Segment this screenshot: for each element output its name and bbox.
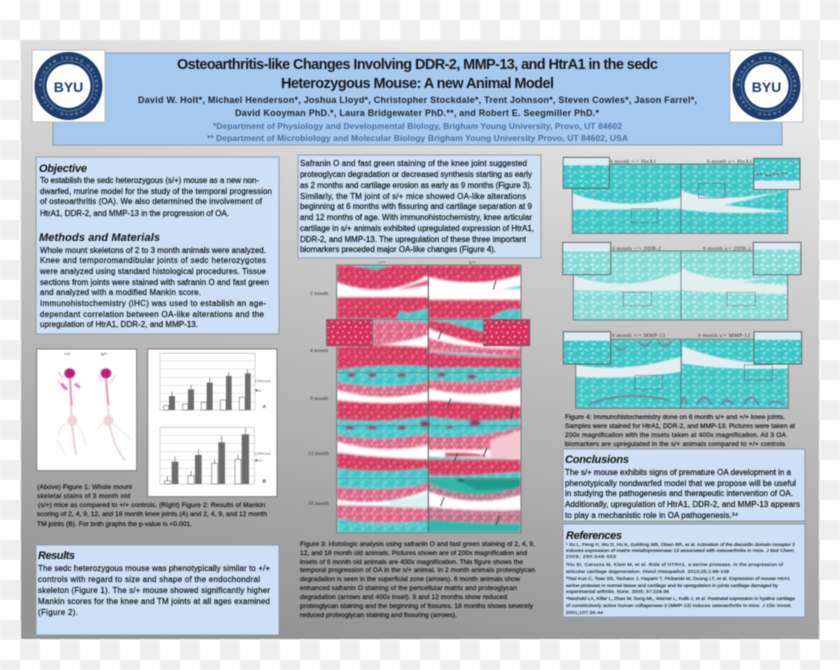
- bar chart B: s/+: [258, 458, 263, 462]
- authors: [138, 95, 697, 118]
- caption: figure 3: insets of 6 month old animals are 400x magnification. This figure shows the: [300, 559, 523, 566]
- caption: figure 3: degradation (arrows and 400x inset). 9 and 12 months show reduced: [300, 594, 507, 601]
- reference list: induces expression of matrix metalloproteinase 13 associated with osteoarthritis in mice. J Biol Chem.: [566, 548, 795, 554]
- bar chart B: Wild type: [258, 452, 271, 456]
- caption: figure 4: biomarkers are upregulated in the s/+ animals compared to +/+ controls: [565, 441, 786, 448]
- inset: MMP-13 left: [563, 332, 611, 364]
- caption: figure 3: enhanced safranin O staining of the pericellular matrix and proteoglycan: [300, 585, 517, 592]
- title: Heterozygous Mouse: A new Animal Model: [281, 76, 554, 92]
- inset: HtrA1 left: [563, 157, 609, 188]
- objective text: [40, 176, 272, 218]
- caption: figure 3: reduced proteoglycan staining and fissuring (arrows).: [300, 612, 457, 619]
- results text: controls with regard to size and shape of the endochondral: [38, 575, 260, 584]
- title: Osteoarthritis-like Changes Involving DDR-2, MMP-13, and HtrA1 in the sedc: [177, 57, 658, 73]
- panel: objective and methods: [36, 157, 279, 334]
- reference list: [566, 542, 795, 616]
- caption: figure 3: degradation is seen in the superficial zone (arrows). 6 month animals show: [300, 576, 520, 583]
- caption: figure 3: Figure 3: Histologic analysis using safranin O and fast green staining of 2, 4, 9,: [300, 541, 535, 548]
- heading: references: References: [566, 530, 622, 542]
- figure 4 panel labels: 6 month s/+ HtrA1: [707, 159, 752, 165]
- heading: conclusions: Conclusions: [565, 454, 629, 466]
- heading: objective: Objective: [39, 163, 87, 175]
- inset: DDR-2 right: [753, 242, 801, 275]
- bar chart B: [160, 427, 271, 484]
- caption: figure 3: proteoglycan staining and the beginning of fissures. 18 months shows severely: [300, 603, 534, 610]
- caption: figure 4: [565, 414, 795, 448]
- figure 3 column labels: +/+: [378, 260, 386, 266]
- figure 1: whole mount skeleton photo: [37, 349, 137, 471]
- reference list: serine protease in normal tissue and cartilage and its upregulation in joints cartilage damaged by: [566, 583, 779, 589]
- methods text: Immunohistochemistry (IHC) was used to establish an age-: [40, 299, 266, 308]
- figure 3 row labels: 18 month: [308, 501, 329, 507]
- logo: BYU left: BYU: [54, 79, 83, 95]
- methods text: and analyzed with a modified Mankin score.: [40, 288, 201, 297]
- figure 3 row labels: 2 month: [310, 291, 328, 297]
- caption: figures 1 and 2: (Above) Figure 1: Whole mount: [37, 484, 132, 491]
- figure 4: immunohistochemistry panels: [563, 157, 802, 408]
- figure 4 panel labels: 6 month +/+ HtrA1: [610, 159, 656, 165]
- figure 4 panel labels: 6 month s/+ MMP-13: [698, 333, 750, 339]
- figure 3 row labels: 12 month: [308, 451, 329, 457]
- results text: Mankin scores for the knee and TM joints at all ages examined: [38, 597, 270, 606]
- panel: middle intro text: beginning at 6 months with fissuring and cartilage separation at 9: [300, 202, 533, 211]
- caption: figures 1 and 2: (s/+) mice as compared to +/+ controls. (Right) Figure 2: Results of Mankin: [38, 502, 265, 509]
- bar chart A: [160, 353, 271, 410]
- figure 4 panel labels: 6 month +/+ MMP-13: [612, 333, 665, 339]
- conclusions text: phenotypically nondwarfed model that we propose will be useful: [565, 479, 796, 488]
- reference list: experimental arthritis. Bone. 2005; 37:229-36: [566, 589, 669, 595]
- panel: HtrA1: [563, 157, 800, 233]
- panel: middle intro text: biomarkers preceded major OA-like changes (Figure 4).: [300, 245, 496, 254]
- panel: middle intro text: [298, 155, 541, 258]
- methods text: dependant correlation between OA-like alterations and the: [40, 310, 265, 319]
- methods text: [39, 246, 269, 329]
- conclusions text: in studying the pathogenesis and therapeutic intervention of OA.: [565, 489, 793, 498]
- row: 9 month: [337, 373, 521, 426]
- affiliations: *Department of Physiology and Developmental Biology, Brigham Young University, Provo, UT 84602: [213, 121, 622, 131]
- figure 3 row labels: 9 month: [310, 396, 328, 402]
- conclusions text: [565, 468, 800, 520]
- reference list: articular cartilage degeneration. Histol Histopathol. 2010;25:1:98-108: [566, 569, 729, 575]
- methods text: Knee and temporomandibular joints of sedc heterozygotes: [40, 256, 266, 265]
- heading: results: Results: [38, 550, 75, 562]
- inset: HtrA1 right: [754, 158, 800, 189]
- caption: figure 3: 12, and 18 month old animals. Pictures shown are of 200x magnification and: [300, 550, 527, 557]
- bar chart A: Wild type: [258, 379, 271, 383]
- objective text: dwarfed, murine model for the study of the temporal progression: [40, 187, 272, 196]
- reference list: 2001;107:35-44: [566, 610, 603, 616]
- caption: figure 4: Figure 4: Immunohistochemistry done on 6 month s/+ and +/+ knee joints.: [565, 414, 785, 421]
- figure 2: Mankin score bar charts: [148, 349, 277, 497]
- row: 2 month: [337, 265, 521, 319]
- panel: middle intro text: as 2 months and cartilage erosion as early as 9 months (Figure 3).: [300, 181, 532, 190]
- panel: DDR-2: [563, 242, 801, 320]
- conclusions text: to play a mechanistic role in OA pathogenesis.³⁴: [565, 511, 739, 520]
- figure 3 row labels: [308, 291, 329, 507]
- panel: results: [36, 545, 279, 635]
- panel: middle intro text: and 12 months of age. With immunohistochemistry, knee articular: [300, 213, 532, 222]
- figure 3 column labels: s/+: [469, 260, 476, 266]
- panel: middle intro text: proteoglycan degradation or decreased synthesis starting as early: [300, 170, 532, 179]
- header banner: [53, 53, 782, 145]
- figure 4 panel labels: [610, 159, 752, 339]
- panel: middle intro text: cartilage in s/+ animals exhibited upregulated expression of HtrA1,: [300, 224, 534, 233]
- figure 1: whole mount skeleton photo: +/+: [64, 351, 71, 356]
- figure 4 panel labels: 6 month s/+ DDR-2: [703, 246, 751, 252]
- caption: figures 1 and 2: [37, 484, 267, 528]
- objective text: of osteoarthritis (OA). We also determined the involvement of: [40, 197, 263, 206]
- reference list: of constitutively active human collagenase-3 (MMP-13) induces osteoarthritis in mice. J Clin Invest.: [566, 603, 792, 609]
- methods text: sections from joints were stained with safranin O and fast green: [40, 278, 269, 287]
- logo: BYU left: BRIGHAM YOUNG UNIVERSITY · PROVO, UTAH ·: [38, 56, 99, 116]
- figure 1: whole mount skeleton photo: s/+: [101, 351, 108, 356]
- bar chart A: s/+: [258, 388, 263, 392]
- panel: middle intro text: Safranin O and fast green staining of the knee joint suggested: [300, 159, 527, 168]
- results text: The sedc heterozygous mouse was phenotypically similar to +/+: [38, 564, 270, 573]
- figure 3 column labels: [378, 260, 476, 266]
- affiliations: [207, 121, 628, 143]
- caption: figure 4: Samples were stained for HtrA1, DDR-2, and MMP-13. Pictures were taken at: [565, 423, 795, 430]
- inset: right 6 month: [484, 320, 530, 346]
- reference list: ⁴Neuhold LA, Killar L, Zhao W, Sung ML, Warner L, Kulik J, et al. Postnatal expression in hyaline cartilage: [566, 596, 795, 602]
- methods text: were analyzed using standard histological procedures. Tissue: [39, 267, 267, 276]
- authors: David W. Holt*, Michael Henderson*, Joshua Lloyd*, Christopher Stockdale*, Trent Johnson*, Steven Cowles*, Jason Farrel*,: [138, 95, 697, 105]
- panel: conclusions: [563, 449, 805, 521]
- results text: [38, 564, 270, 617]
- logo: BYU right: BYU: [752, 79, 781, 95]
- objective text: To establish the sedc heterozygous (s/+) mouse as a new non-: [40, 176, 259, 185]
- methods text: Whole mount skeletons of 2 to 3 month animals were analyzed.: [40, 246, 266, 255]
- authors: David Kooyman PhD.*, Laura Bridgewater PhD.**, and Robert E. Seegmiller PhD.*: [235, 108, 599, 118]
- logo: BYU right: [729, 49, 804, 123]
- caption: figure 3: temporal progression of OA in the s/+ animal. In 2 month animals proteoglycan: [300, 567, 535, 574]
- inset: left 6 month: [327, 320, 372, 346]
- conclusions text: The s/+ mouse exhibits signs of premature OA development in a: [565, 468, 792, 477]
- conclusions text: Additionally, upregulation of HtrA1, DDR-2, and MMP-13 appears: [565, 500, 800, 509]
- row: 18 month: [337, 478, 521, 533]
- caption: figures 1 and 2: skeletal stains of 3 month old: [37, 493, 130, 500]
- inset: DDR-2 left: [563, 242, 611, 275]
- caption: figures 1 and 2: scoring of 2, 4, 9, 12, and 18 month knee joints (A) and 2, 4, 9, and 12 month: [37, 511, 267, 518]
- reference list: 2005; 280:548-555: [566, 554, 616, 560]
- panel: middle intro text: DDR-2, and MMP-13. The upregulation of these three important: [300, 235, 527, 244]
- panel: references: [563, 524, 805, 617]
- affiliations: ** Department of Microbiology and Molecular Biology Brigham Young University Provo, UT 84602, USA: [207, 133, 628, 143]
- row: 12 month: [337, 420, 521, 478]
- results text: (Figure 2).: [38, 608, 78, 617]
- panel: MMP-13: [563, 332, 802, 408]
- results text: skeleton (Figure 1). The s/+ mouse showed significantly higher: [38, 586, 270, 595]
- logo: BYU right: BRIGHAM YOUNG UNIVERSITY · PROVO, UTAH ·: [736, 56, 797, 116]
- figure 3: histology image grid: [327, 265, 530, 533]
- figure 3 row labels: 4 month: [310, 348, 328, 354]
- panel: middle intro text: Similarly, the TM joint of s/+ mice showed OA-like alterations: [300, 192, 526, 201]
- bar chart A: A: [263, 404, 267, 409]
- caption: figure 3: [300, 541, 535, 619]
- reference list: ²Hu SI, Carozza M, Klein M, et al. Role of HTRA1, a serine protease, in the progression of: [566, 562, 784, 568]
- objective text: HtrA1, DDR-2, and MMP-13 in the progression of OA.: [40, 209, 229, 218]
- logo: BYU left: [31, 49, 106, 123]
- title: [177, 57, 658, 92]
- reference list: ³Tsai Kuo C, Tsao SS, Tschanz J, Hayami T, Pickarski M, Duong LT, et al. Expression of mouse HtrA1: [566, 576, 790, 582]
- row: 4 month: [337, 319, 521, 373]
- methods text: upregulation of HtrA1, DDR-2, and MMP-13.: [40, 320, 198, 329]
- reference list: ¹ Xu L, Peng H, Wu D, Hu K, Goldring MB, Olsen BR, et al. Activation of the discoidin domain receptor 2: [566, 542, 795, 548]
- figure 4 panel labels: 6 month +/+ DDR-2: [612, 246, 661, 252]
- heading: methods and materials: Methods and Materials: [39, 232, 160, 244]
- bar chart B: B: [263, 479, 267, 484]
- inset: MMP-13 right: [754, 332, 802, 364]
- caption: figures 1 and 2: TM joints (B). For both graphs the p-value is <0.001.: [37, 521, 192, 528]
- caption: figure 4: 200x magnification with the insets taken at 400x magnification. All 3 OA: [565, 432, 787, 439]
